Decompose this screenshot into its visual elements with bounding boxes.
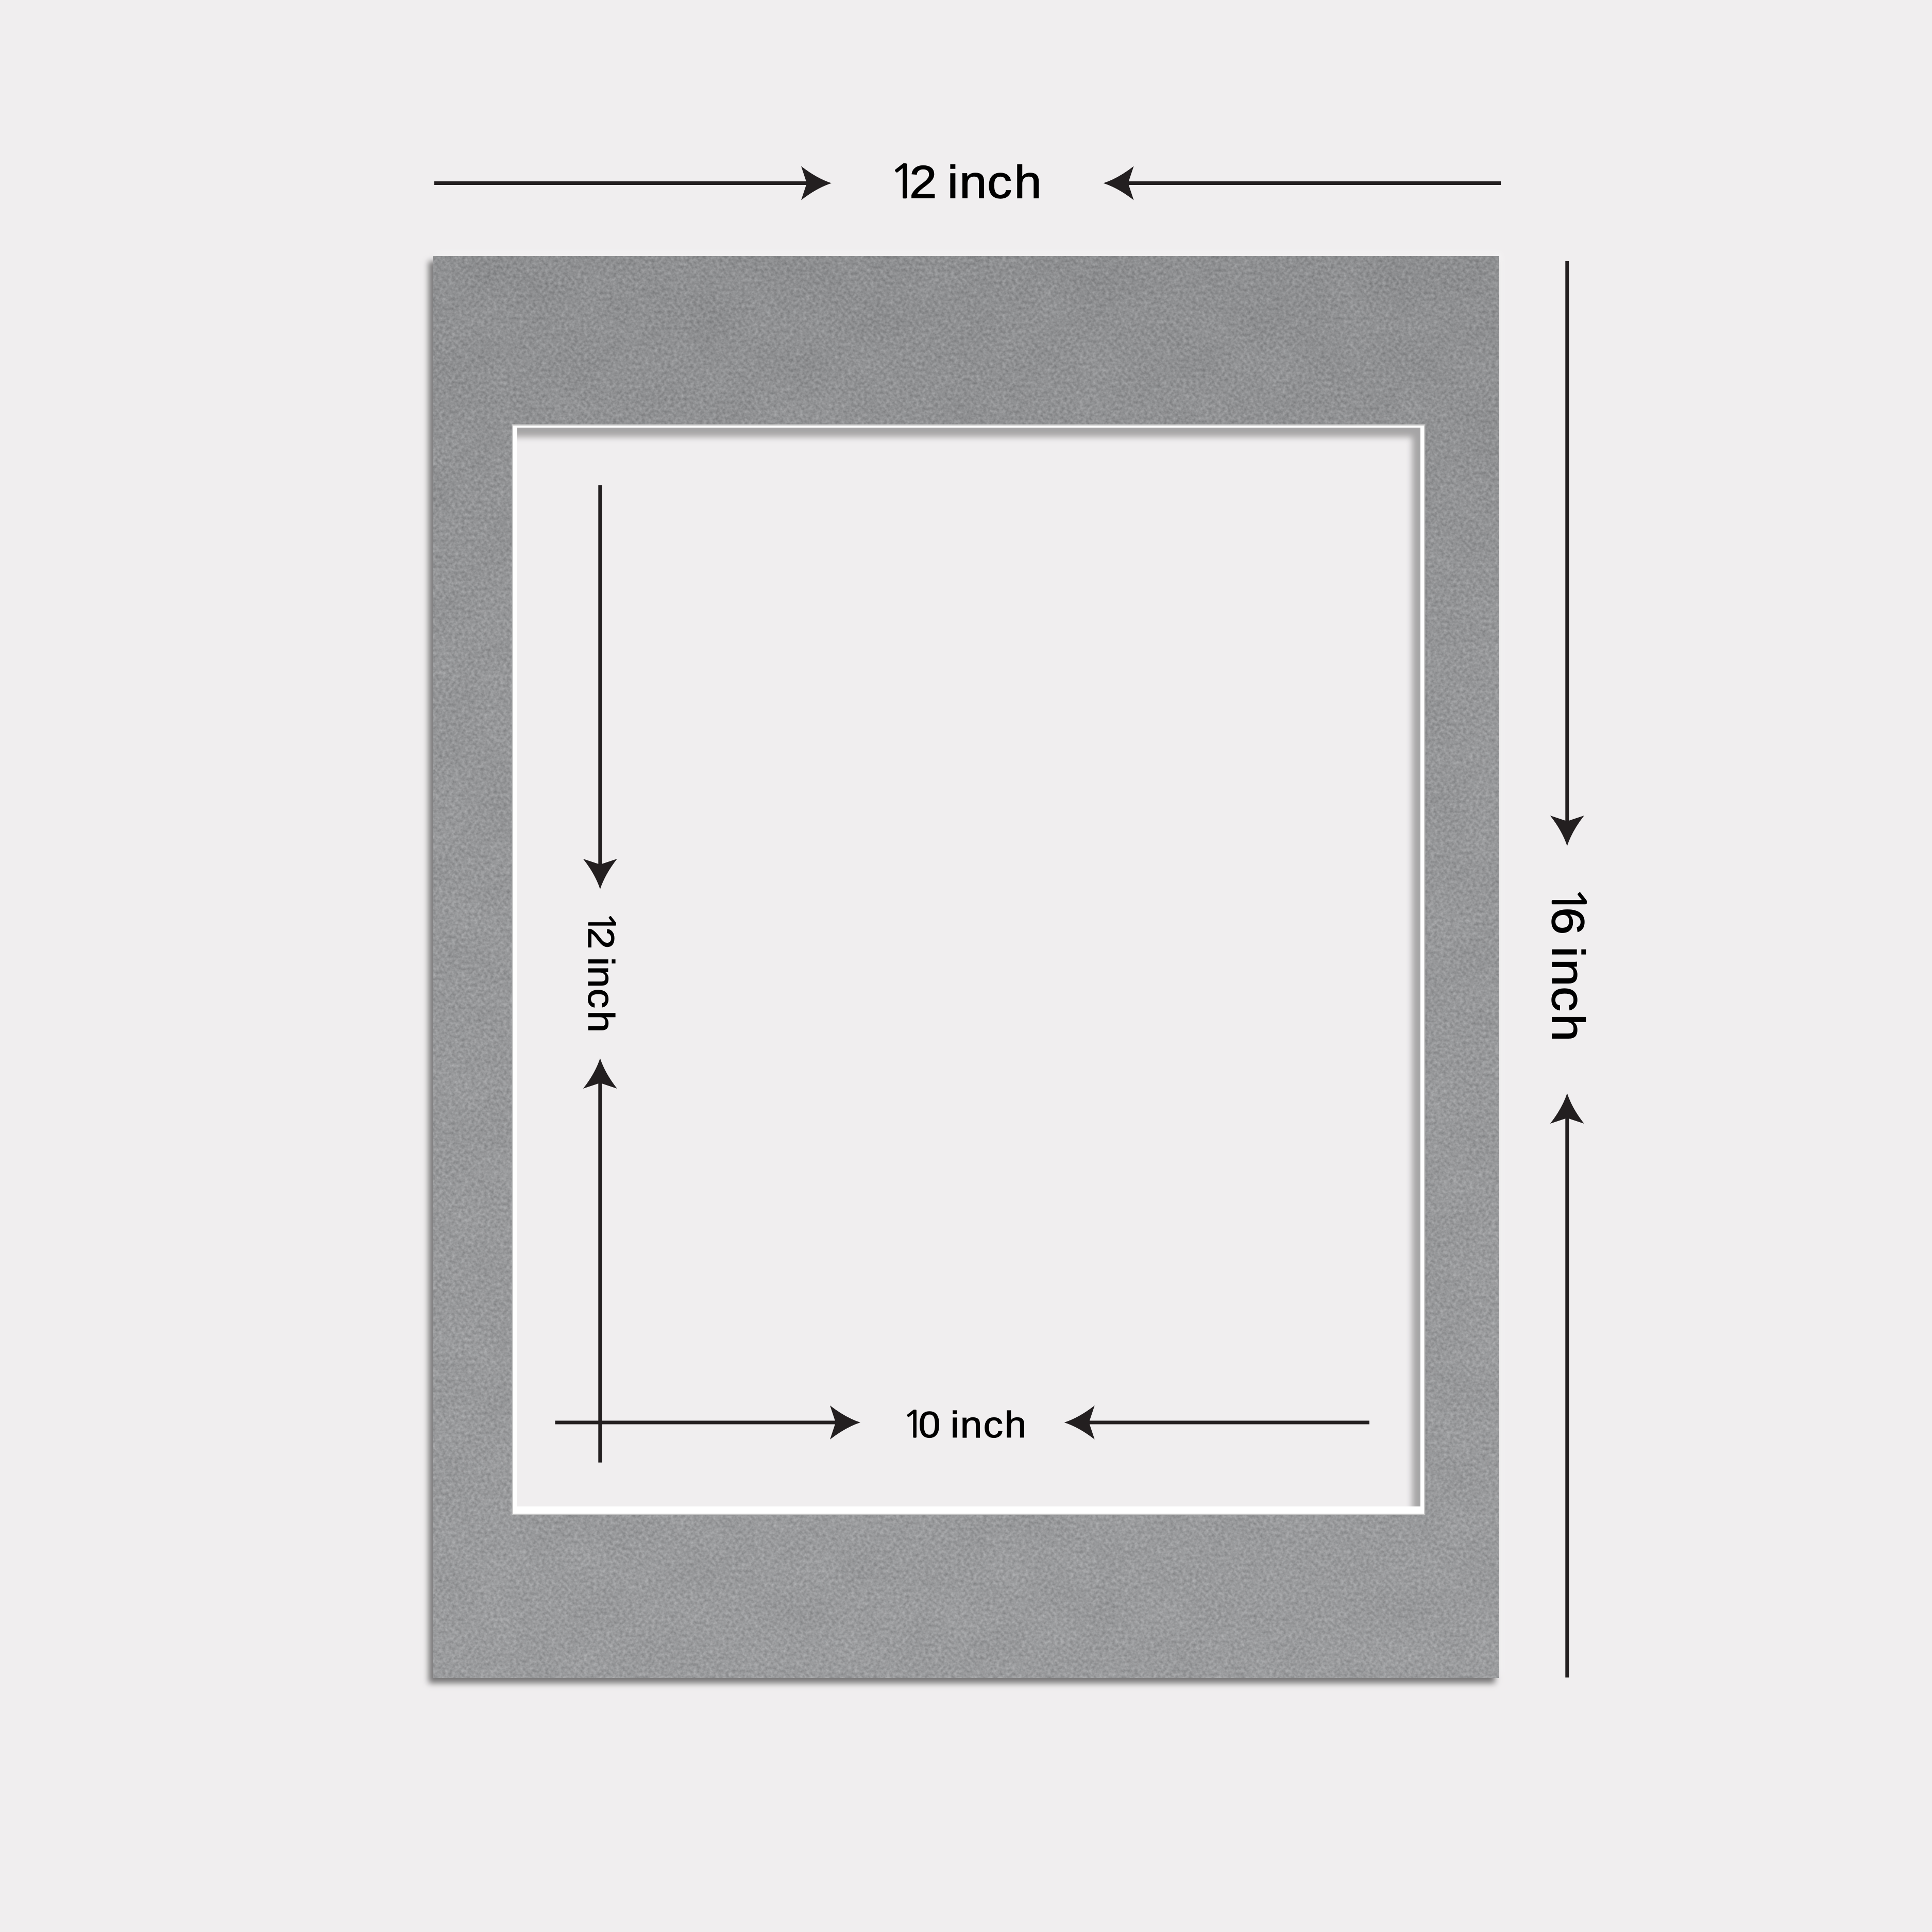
arrow: top width, right side — [1104, 166, 1501, 200]
label: window height 12 inch: 2 inch — [581, 927, 621, 1032]
label: outer width 12 inch: 2 inch — [909, 156, 1042, 208]
mat board texture — [433, 256, 1499, 1678]
arrow: window width, right part — [1064, 1405, 1369, 1439]
arrow: top width, left side — [434, 166, 832, 200]
label: outer height 16 inch: 1 — [1546, 886, 1591, 916]
arrow: outer height, lower part — [1550, 1093, 1584, 1677]
window interior with inner shadow — [517, 428, 1420, 1506]
arrow: outer height, upper part — [1550, 261, 1584, 846]
label: window width 10 inch: 0 inch — [919, 1404, 1026, 1445]
white bevel of window opening — [513, 426, 1424, 1514]
arrow: window height, lower part — [583, 1058, 617, 1463]
label: window width 10 inch: 1 — [902, 1406, 925, 1443]
panel: grey mat board with cut-out window — [433, 256, 1499, 1678]
arrow: window width, left part — [555, 1405, 860, 1439]
arrow: window height, upper part — [583, 485, 617, 889]
label: outer width 12 inch: 1 — [888, 159, 918, 205]
label: window height 12 inch: 1 — [583, 911, 620, 935]
label: outer height 16 inch: 6 inch — [1543, 907, 1594, 1042]
